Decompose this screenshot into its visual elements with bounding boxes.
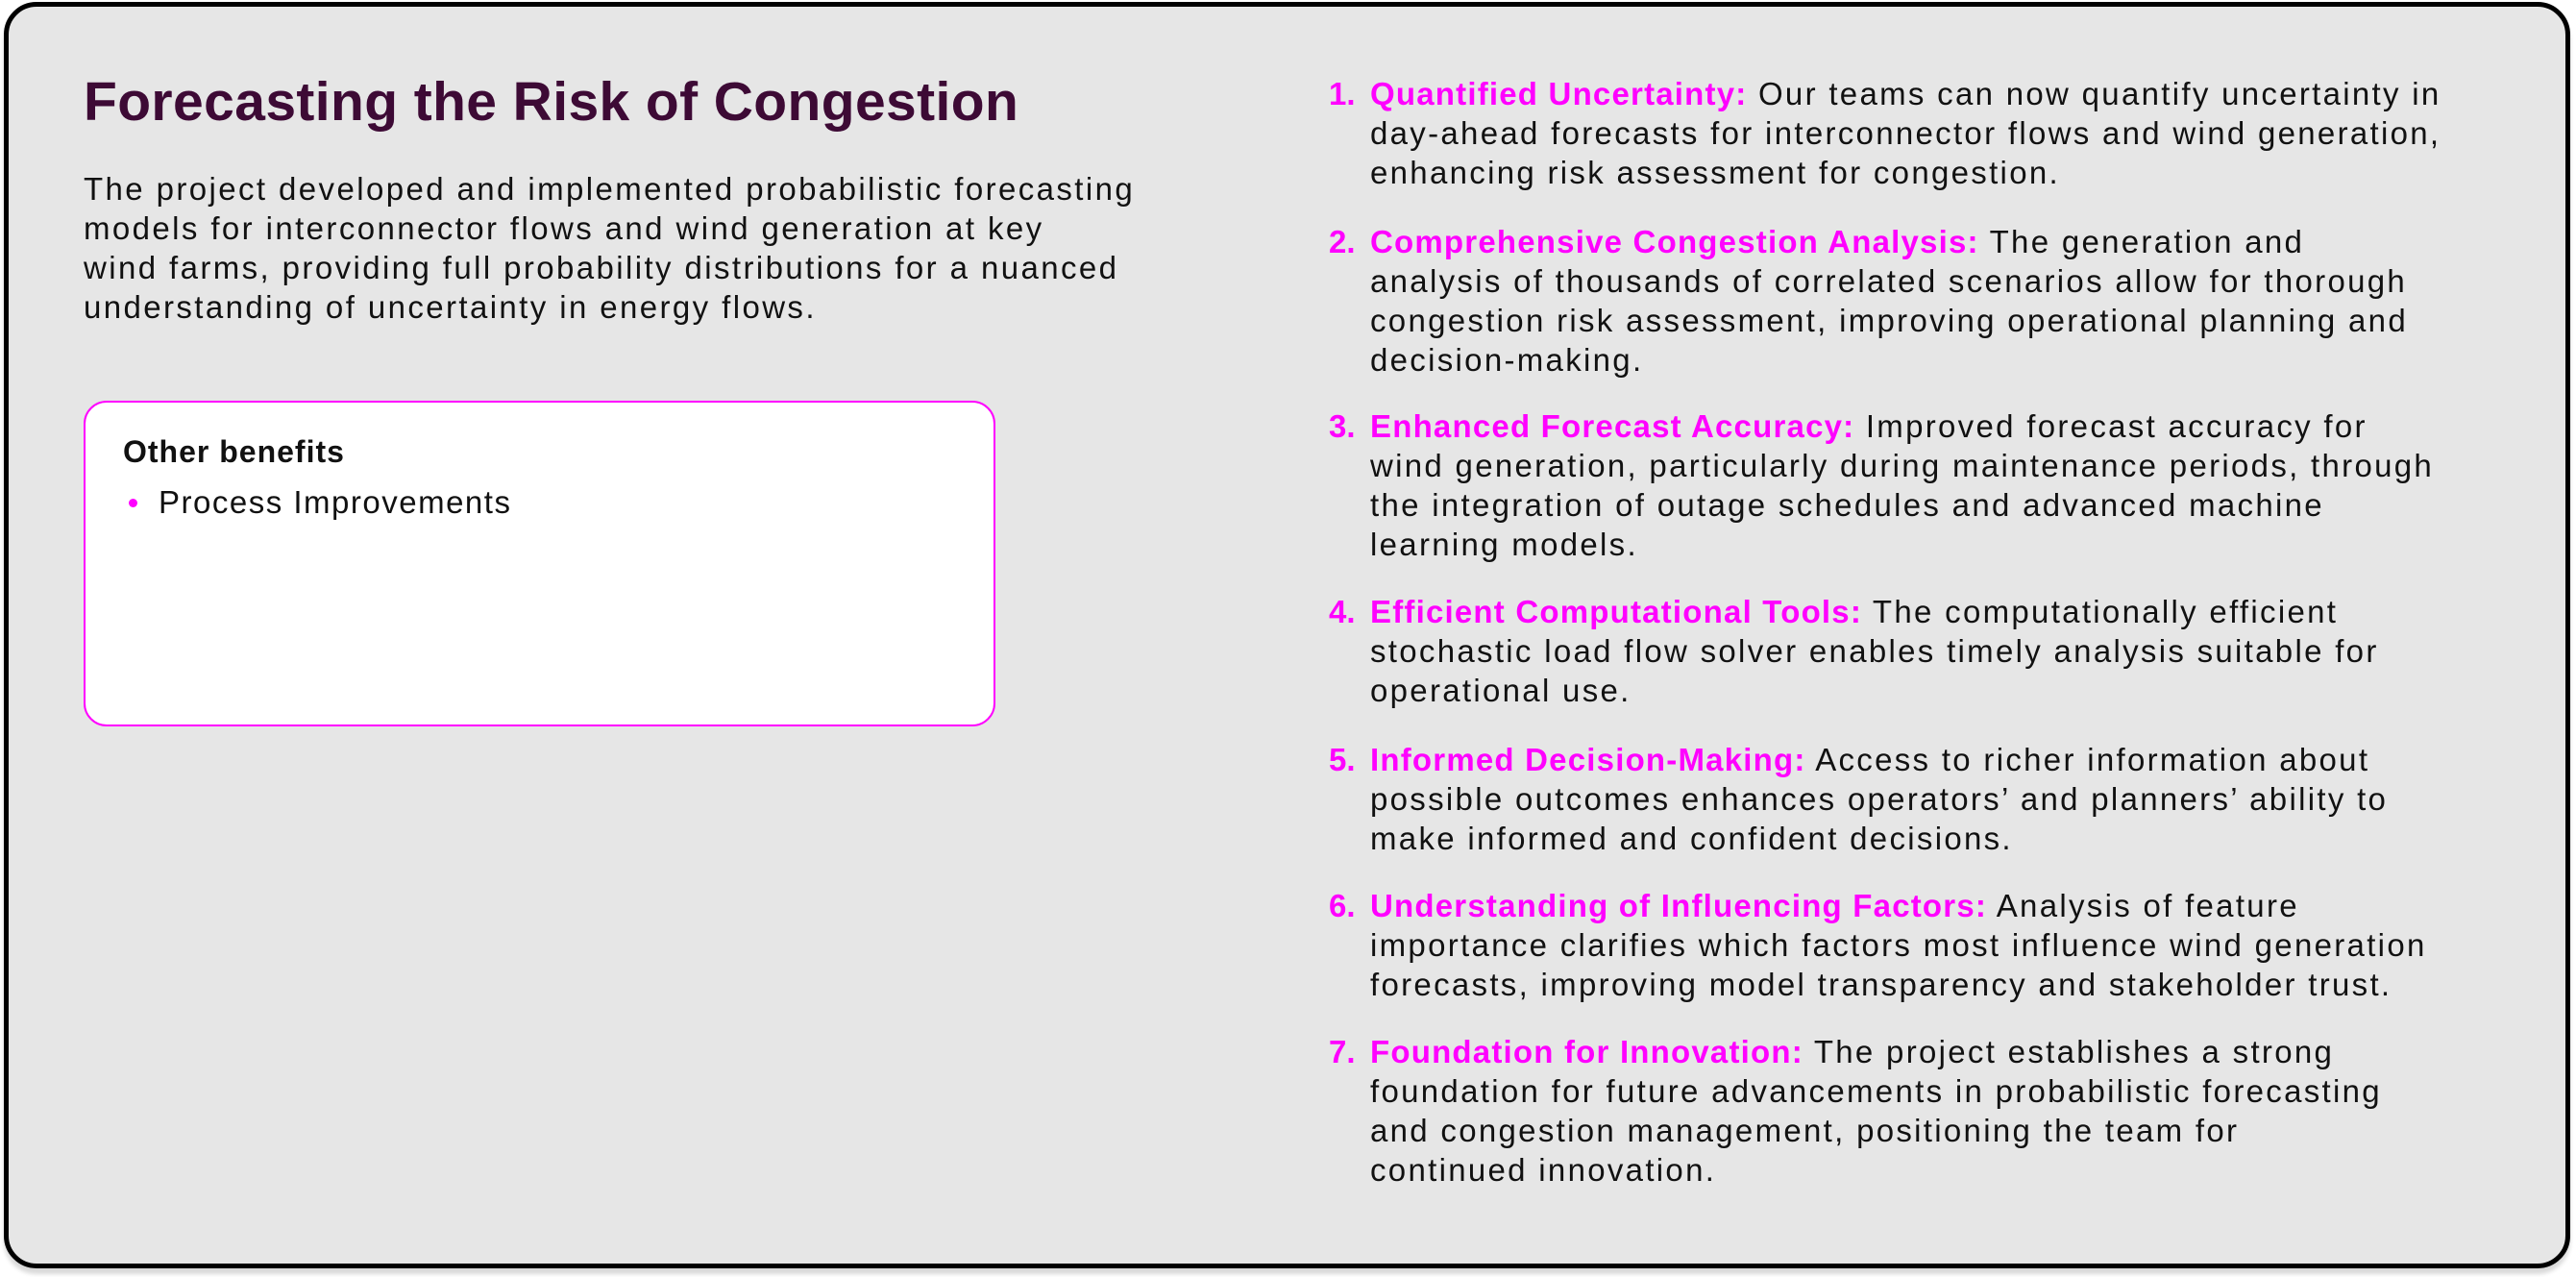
list item 7: and congestion management, positioning the team for	[1370, 1113, 2239, 1148]
list item 3: wind generation, particularly during maintenance periods, through	[1370, 448, 2434, 483]
heading: other benefits: Other benefits	[123, 434, 345, 469]
list item 7	[1329, 1034, 2382, 1188]
bullet: process improvements: Process Improvements	[159, 484, 511, 520]
text block: intro paragraph	[84, 171, 1135, 325]
list item 1: 1.	[1329, 76, 1356, 111]
list item 2: decision-making.	[1370, 342, 1643, 378]
list item 5: Informed Decision-Making: Access to richer information about	[1370, 742, 2369, 777]
list item 6: Understanding of Influencing Factors: Analysis of feature	[1370, 888, 2299, 923]
list item 6: forecasts, improving model transparency and stakeholder trust.	[1370, 967, 2392, 1002]
list item 1: Quantified Uncertainty: Our teams can now quantify uncertainty in	[1370, 76, 2441, 111]
list item 3: the integration of outage schedules and advanced machine	[1370, 487, 2324, 523]
list item 2: analysis of thousands of correlated scenarios allow for thorough	[1370, 263, 2407, 299]
list item 7: continued innovation.	[1370, 1152, 1716, 1188]
list item 2: 2.	[1329, 224, 1356, 259]
list item 5	[1329, 742, 2388, 856]
text block: intro paragraph: wind farms, providing full probability distributions for a nuanced	[84, 250, 1118, 285]
list item 3	[1329, 408, 2434, 562]
list item 5: make informed and confident decisions.	[1370, 821, 2013, 856]
list item 1: day-ahead forecasts for interconnector flows and wind generation,	[1370, 115, 2441, 151]
list item 7: Foundation for Innovation: The project establishes a strong	[1370, 1034, 2334, 1069]
text block: intro paragraph: The project developed and implemented probabilistic forecasting	[84, 171, 1135, 207]
text block: intro paragraph: understanding of uncertainty in energy flows.	[84, 289, 817, 325]
list item 6	[1329, 888, 2427, 1002]
list item 2	[1329, 224, 2408, 378]
list item 2: Comprehensive Congestion Analysis: The generation and	[1370, 224, 2304, 259]
list item 3: Enhanced Forecast Accuracy: Improved forecast accuracy for	[1370, 408, 2367, 444]
list item 3: learning models.	[1370, 527, 1638, 562]
list item 3: 3.	[1329, 408, 1356, 444]
list item 2: congestion risk assessment, improving operational planning and	[1370, 303, 2408, 338]
list item 4	[1329, 594, 2379, 708]
list item 7: 7.	[1329, 1034, 1356, 1069]
list item 5: 5.	[1329, 742, 1356, 777]
list item 1: enhancing risk assessment for congestion.	[1370, 155, 2060, 190]
list item 5: possible outcomes enhances operators’ and planners’ ability to	[1370, 781, 2388, 817]
list item 6: importance clarifies which factors most influence wind generation	[1370, 927, 2427, 963]
list item 6: 6.	[1329, 888, 1356, 923]
list item 4: operational use.	[1370, 673, 1631, 708]
list item 7: foundation for future advancements in probabilistic forecasting	[1370, 1073, 2382, 1109]
list item 4: 4.	[1329, 594, 1356, 629]
list item 4: stochastic load flow solver enables timely analysis suitable for	[1370, 633, 2379, 669]
list item 1	[1329, 76, 2441, 190]
title: Forecasting the Risk of Congestion	[84, 71, 1018, 133]
list item 4: Efficient Computational Tools: The computationally efficient	[1370, 594, 2338, 629]
text block: intro paragraph: models for interconnector flows and wind generation at key	[84, 210, 1044, 246]
panel: other benefits	[84, 401, 995, 726]
